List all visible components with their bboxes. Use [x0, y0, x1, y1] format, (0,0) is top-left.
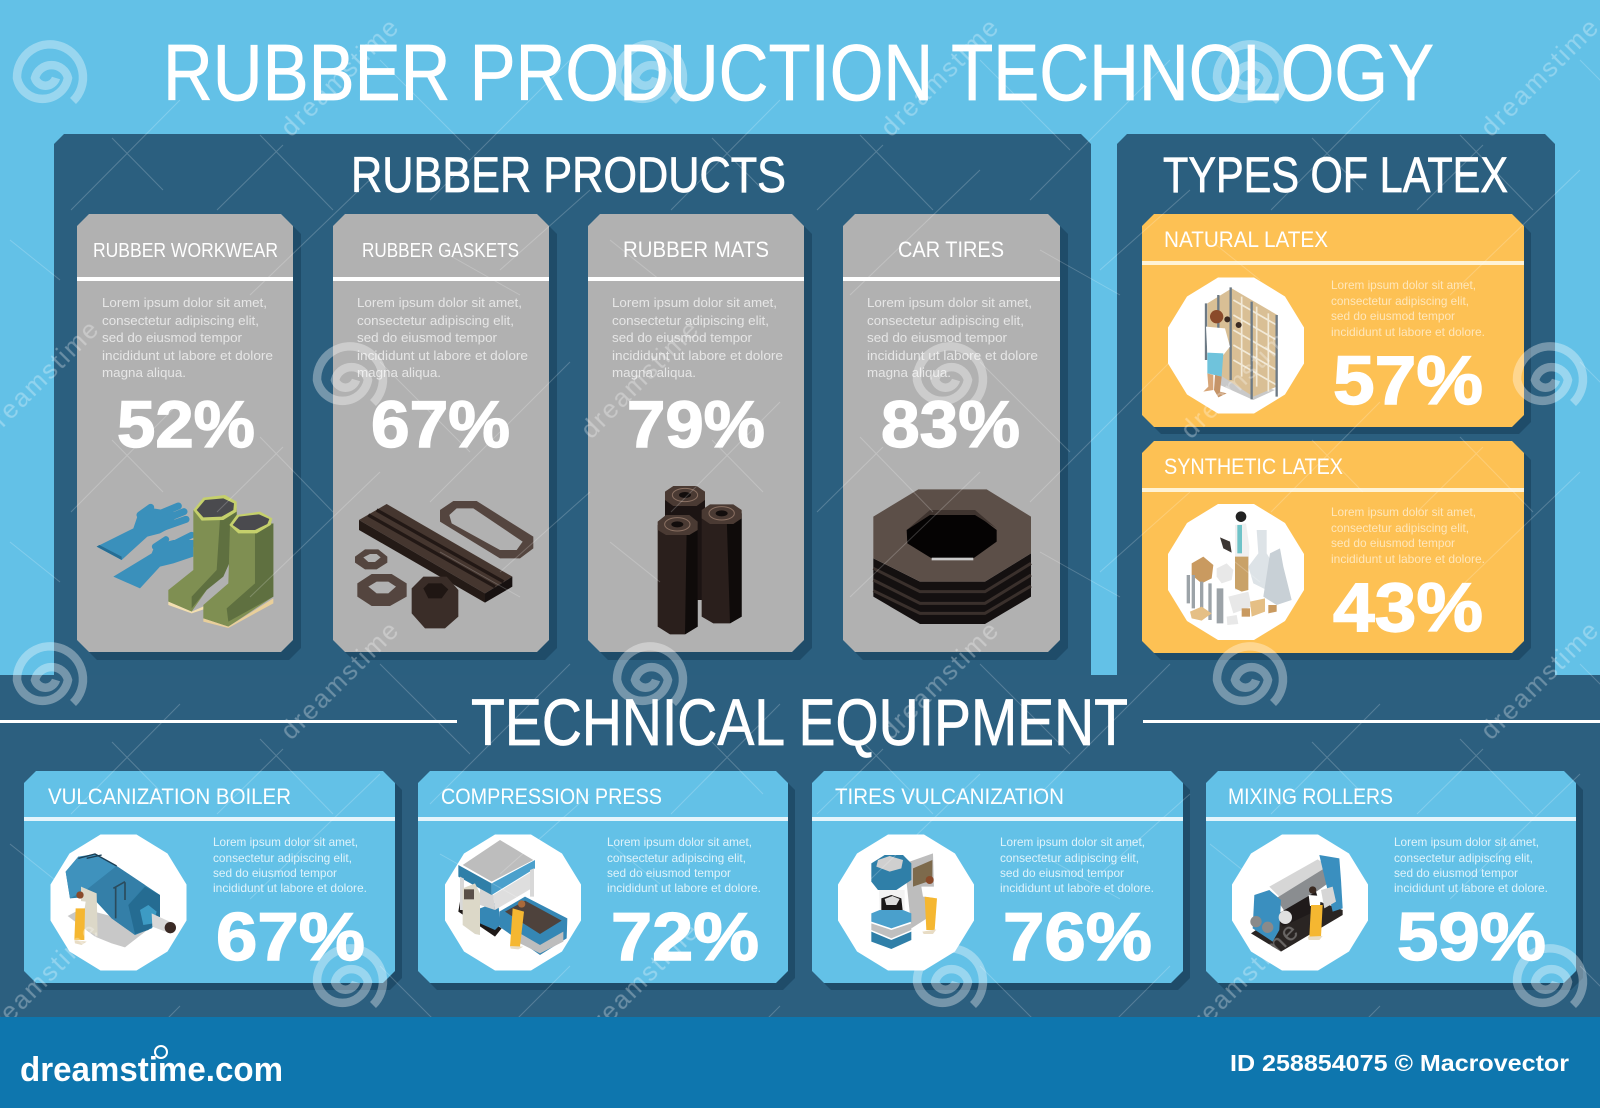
- body text: sed do eiusmod tempor: [612, 330, 753, 345]
- heading: technical equipment: TECHNICAL EQUIPMENT: [471, 685, 1128, 759]
- body text: magna aliqua.: [102, 365, 186, 380]
- card title: VULCANIZATION BOILER: [48, 784, 291, 809]
- card title: CAR TIRES: [898, 237, 1004, 262]
- watermark overlay: dreamstime: [574, 313, 705, 444]
- body text: sed do eiusmod tempor: [102, 330, 243, 345]
- icon: gloves and boots: [97, 495, 273, 628]
- illustration circle: warehouse shelves: [1168, 278, 1304, 414]
- body text: sed do eiusmod tempor: [1000, 866, 1124, 880]
- body text: incididunt ut labore et dolore.: [607, 881, 761, 895]
- body text: [1394, 835, 1548, 895]
- card title: RUBBER WORKWEAR: [93, 240, 278, 262]
- illustration circle: boiler: [50, 834, 186, 970]
- body text: [607, 835, 761, 895]
- card: mixing rollers: [1206, 771, 1583, 990]
- card: tires vulcanization: [812, 771, 1190, 990]
- heading: rubber products: RUBBER PRODUCTS: [351, 147, 786, 203]
- body text: Lorem ipsum dolor sit amet,: [1331, 505, 1476, 519]
- watermark overlay: dreamstime: [274, 11, 405, 142]
- illustration circle: tire press: [838, 834, 974, 970]
- body text: Lorem ipsum dolor sit amet,: [1000, 835, 1145, 849]
- body text: incididunt ut labore et dolore.: [213, 881, 367, 895]
- card: rubber gaskets: [333, 214, 557, 660]
- icon: stacked tires: [873, 489, 1031, 624]
- card title: COMPRESSION PRESS: [441, 784, 662, 809]
- percentage: 67%: [216, 899, 365, 975]
- body text: Lorem ipsum dolor sit amet,: [102, 295, 267, 310]
- body text: [612, 295, 783, 380]
- icon: gaskets: [355, 501, 533, 628]
- body text: sed do eiusmod tempor: [357, 330, 498, 345]
- card title: RUBBER GASKETS: [362, 240, 519, 262]
- card title: NATURAL LATEX: [1164, 227, 1328, 252]
- watermark overlay: dreamstime: [1174, 313, 1305, 444]
- body text: consectetur adipiscing elit,: [612, 313, 769, 328]
- image id credit: ID 258854075 © Macrovector: [1230, 1050, 1569, 1076]
- body text: [1000, 835, 1154, 895]
- percentage: 57%: [1333, 342, 1483, 419]
- title: RUBBER PRODUCTION TECHNOLOGY: [163, 28, 1434, 117]
- body text: sed do eiusmod tempor: [1331, 536, 1455, 550]
- body text: incididunt ut labore et dolore: [612, 348, 783, 363]
- watermark overlay: dreamstime: [874, 614, 1005, 745]
- body text: consectetur adipiscing elit,: [1331, 294, 1469, 308]
- body text: [213, 835, 367, 895]
- card: vulcanization boiler: [24, 771, 402, 990]
- panel: rubber products: [54, 134, 1091, 675]
- percentage: 52%: [117, 387, 255, 461]
- body text: Lorem ipsum dolor sit amet,: [612, 295, 777, 310]
- body text: [357, 295, 528, 380]
- card title: MIXING ROLLERS: [1228, 784, 1393, 809]
- body text: consectetur adipiscing elit,: [607, 851, 746, 865]
- body text: [867, 295, 1038, 380]
- body text: consectetur adipiscing elit,: [1331, 521, 1469, 535]
- body text: Lorem ipsum dolor sit amet,: [1331, 278, 1476, 292]
- watermark overlay: dreamstime: [574, 915, 705, 1046]
- heading: types of latex: TYPES OF LATEX: [1163, 147, 1508, 203]
- body text: Lorem ipsum dolor sit amet,: [357, 295, 522, 310]
- card title: TIRES VULCANIZATION: [835, 784, 1064, 809]
- watermark overlay: dreamstime: [874, 11, 1005, 142]
- body text: consectetur adipiscing elit,: [1000, 851, 1139, 865]
- watermark overlay: dreamstime: [1174, 915, 1305, 1046]
- card: natural latex: [1142, 214, 1531, 434]
- body text: incididunt ut labore et dolore.: [1331, 325, 1485, 339]
- percentage: 59%: [1397, 899, 1546, 975]
- body text: incididunt ut labore et dolore: [867, 348, 1038, 363]
- panel: technical equipment: [0, 675, 1600, 1017]
- watermark overlay: dreamstime: [274, 614, 405, 745]
- body text: incididunt ut labore et dolore.: [1000, 881, 1154, 895]
- body text: magna aliqua.: [867, 365, 951, 380]
- body text: incididunt ut labore et dolore: [357, 348, 528, 363]
- body text: incididunt ut labore et dolore.: [1331, 552, 1485, 566]
- body text: Lorem ipsum dolor sit amet,: [1394, 835, 1539, 849]
- footer bar: [0, 1017, 1600, 1108]
- card: synthetic latex: [1142, 441, 1531, 660]
- percentage: 72%: [611, 899, 759, 975]
- body text: sed do eiusmod tempor: [1394, 866, 1518, 880]
- card: rubber mats: [588, 214, 812, 660]
- panel: types of latex: [1117, 134, 1555, 675]
- body text: Lorem ipsum dolor sit amet,: [867, 295, 1032, 310]
- body text: Lorem ipsum dolor sit amet,: [607, 835, 752, 849]
- card title: RUBBER MATS: [623, 237, 769, 262]
- body text: [1331, 278, 1485, 339]
- body text: incididunt ut labore et dolore.: [1394, 881, 1548, 895]
- percentage: 76%: [1003, 899, 1152, 975]
- percentage: 83%: [881, 387, 1020, 461]
- body text: consectetur adipiscing elit,: [867, 313, 1024, 328]
- card: car tires: [843, 214, 1068, 660]
- body text: Lorem ipsum dolor sit amet,: [213, 835, 358, 849]
- footer logo text: dreamstime.com: [20, 1051, 283, 1089]
- card title: SYNTHETIC LATEX: [1164, 454, 1343, 479]
- body text: magna aliqua.: [357, 365, 441, 380]
- card: compression press: [418, 771, 795, 990]
- icon: rolled mats: [658, 486, 742, 634]
- body text: consectetur adipiscing elit,: [102, 313, 259, 328]
- body text: magna aliqua.: [612, 365, 696, 380]
- percentage: 67%: [371, 387, 510, 461]
- card: rubber workwear: [77, 214, 301, 660]
- body text: consectetur adipiscing elit,: [357, 313, 514, 328]
- body text: sed do eiusmod tempor: [213, 866, 337, 880]
- body text: [1331, 505, 1485, 566]
- body text: sed do eiusmod tempor: [867, 330, 1008, 345]
- illustration circle: rollers: [1232, 834, 1368, 970]
- percentage: 43%: [1333, 569, 1483, 646]
- illustration circle: laboratory: [1168, 504, 1304, 640]
- percentage: 79%: [627, 387, 765, 461]
- body text: incididunt ut labore et dolore: [102, 348, 273, 363]
- body text: [102, 295, 273, 380]
- body text: sed do eiusmod tempor: [607, 866, 731, 880]
- illustration circle: press: [445, 834, 581, 970]
- body text: consectetur adipiscing elit,: [1394, 851, 1533, 865]
- body text: sed do eiusmod tempor: [1331, 309, 1455, 323]
- body text: consectetur adipiscing elit,: [213, 851, 352, 865]
